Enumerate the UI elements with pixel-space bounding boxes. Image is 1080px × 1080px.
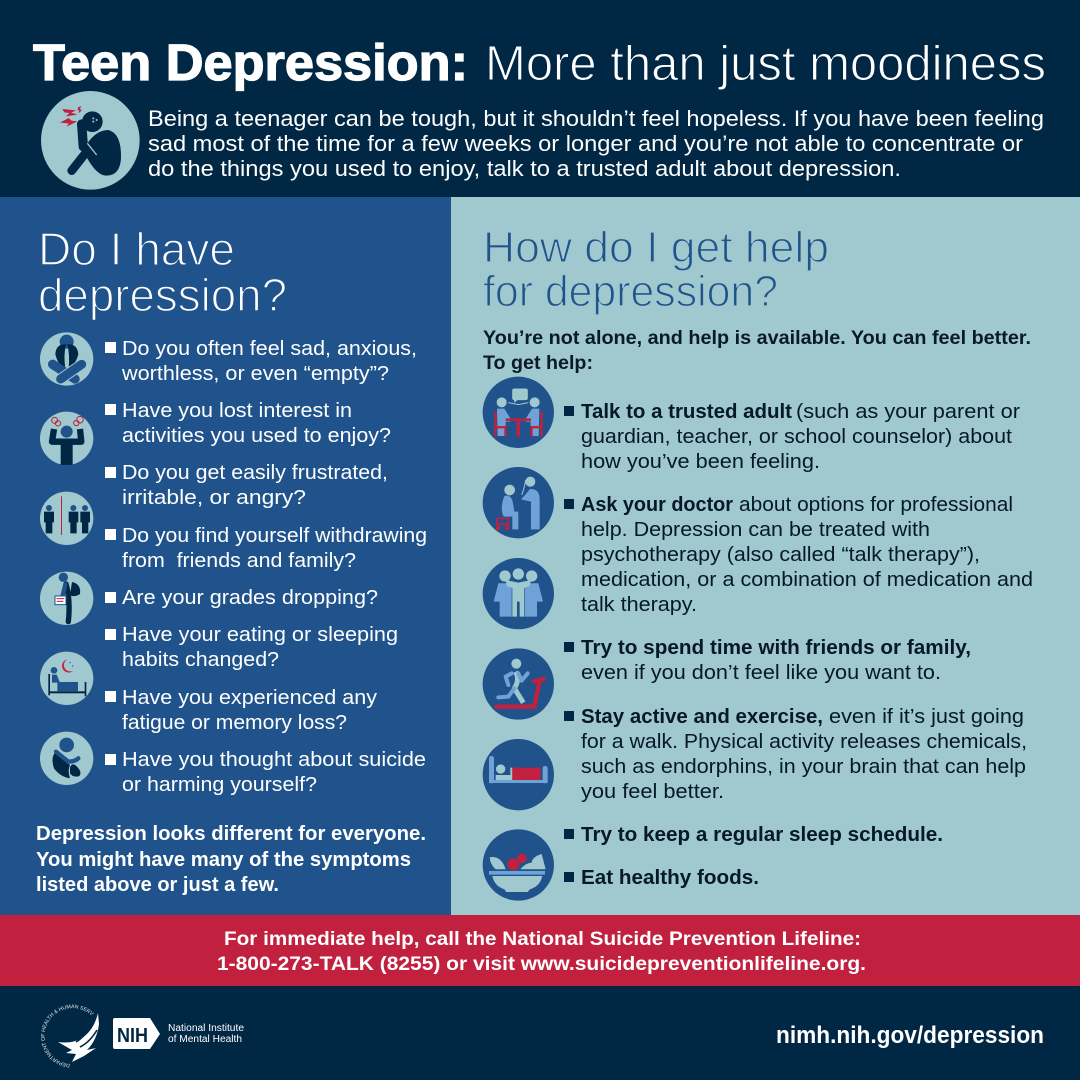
logo: HHS seal [40, 1004, 99, 1068]
heading: How do I get help [483, 223, 829, 316]
help steps list: you feel better. [581, 780, 724, 803]
header band [0, 0, 1080, 197]
icon: treadmill runner [483, 648, 554, 720]
help steps list: Talk to a trusted adult [581, 400, 792, 423]
closing note: Depression looks different for everyone. [36, 822, 426, 845]
icon: angry person [40, 412, 93, 465]
crisis lifeline banner: 1-800-273-TALK (8255) or visit www.suicidepreventionlifeline.org. [217, 953, 866, 975]
help steps list [564, 400, 1033, 889]
icon: student with grades [40, 572, 93, 625]
symptom list: irritable, or angry? [122, 486, 306, 509]
logo: NIH National Institute of Mental Health: NIH [117, 1025, 148, 1047]
intro text: Being a teenager can be tough, but it shouldn’t feel hopeless. If you have been feeling [148, 106, 1044, 131]
symptom list: activities you used to enjoy? [122, 424, 391, 447]
left panel background [0, 197, 451, 915]
logo: NIH National Institute of Mental Health: National Institute [168, 1023, 245, 1034]
help steps list: guardian, teacher, or school counselor) about [581, 425, 1012, 448]
closing note [36, 822, 426, 896]
intro text: do the things you used to enjoy, talk to a trusted adult about depression. [148, 156, 901, 181]
symptom list: Do you find yourself withdrawing [122, 524, 427, 547]
symptom list: fatigue or memory loss? [122, 711, 347, 734]
logo: NIH National Institute of Mental Health: of Mental Health [168, 1034, 242, 1045]
symptom list: or harming yourself? [122, 773, 317, 796]
symptom list: from friends and family? [122, 549, 356, 572]
heading: How do I get help: for depression? [483, 267, 778, 316]
help steps list: Try to spend time with friends or family, [581, 636, 971, 659]
symptom list: Have you thought about suicide [122, 748, 426, 771]
help steps list: even if it’s just going [829, 705, 1024, 728]
icon: teen hunched with head pain [41, 91, 140, 190]
website url: nimh.nih.gov/depression [776, 1022, 1044, 1049]
symptom list: Do you often feel sad, anxious, [122, 337, 417, 360]
crisis lifeline banner: For immediate help, call the National Suicide Prevention Lifeline: [224, 928, 861, 950]
symptom list [105, 337, 427, 796]
heading: Do I have depression: depression? [38, 269, 287, 321]
help steps list: help. Depression can be treated with [581, 518, 930, 541]
icon: person hugging knees [40, 732, 93, 785]
heading: How do I get help: How do I get help [483, 223, 829, 272]
crisis lifeline banner [0, 915, 1080, 986]
help steps list: Stay active and exercise, [581, 705, 823, 728]
help steps list: Eat healthy foods. [581, 866, 759, 889]
footer band [0, 986, 1080, 1080]
help steps list: about options for professional [739, 493, 1013, 516]
icon: talking at table [483, 377, 554, 448]
help steps list: how you’ve been feeling. [581, 450, 820, 473]
right panel background [451, 197, 1080, 915]
icon: friends group [483, 558, 554, 629]
intro: help is available: You’re not alone, and help is available. You can feel better. [483, 327, 1031, 349]
help steps list: for a walk. Physical activity releases chemicals, [581, 730, 1027, 753]
help steps list: medication, or a combination of medication and [581, 568, 1033, 591]
symptom list: worthless, or even “empty”? [121, 362, 389, 385]
intro text: sad most of the time for a few weeks or longer and you’re not able to concentrate or [148, 131, 1024, 156]
intro: help is available: To get help: [483, 352, 593, 374]
help steps list: even if you don’t feel like you want to. [581, 661, 941, 684]
logo: HHS seal: DEPARTMENT OF HEALTH & HUMAN SERVICES, USA [40, 1004, 94, 1068]
icon: sad person cross-legged [40, 332, 93, 386]
symptom list: Have your eating or sleeping [122, 623, 398, 646]
symptom list: Do you get easily frustrated, [122, 461, 388, 484]
title: Teen Depression: [33, 34, 468, 91]
heading: Do I have depression [38, 223, 287, 321]
title [33, 34, 1046, 91]
icon: person apart from others [40, 492, 93, 545]
panel: do I have depression [36, 223, 427, 896]
help steps list: Ask your doctor [581, 493, 733, 516]
help steps list: Try to keep a regular sleep schedule. [581, 823, 943, 846]
closing note: listed above or just a few. [36, 873, 279, 896]
title: More than just moodiness [485, 37, 1046, 91]
closing note: You might have many of the symptoms [36, 848, 411, 871]
intro: help is available [483, 327, 1031, 374]
help steps list: (such as your parent or [796, 400, 1020, 423]
heading: Do I have depression: Do I have [38, 223, 235, 275]
help steps list: talk therapy. [581, 593, 697, 616]
intro text [148, 106, 1044, 181]
symptom list: Are your grades dropping? [122, 586, 378, 609]
help steps list: such as endorphins, in your brain that can help [581, 755, 1026, 778]
logo: NIH National Institute of Mental Health [113, 1018, 245, 1049]
icon: bed [483, 739, 554, 810]
help steps list: psychotherapy (also called “talk therapy”), [581, 543, 980, 566]
icon: bowl of healthy food [483, 829, 554, 901]
icon: doctor with patient [483, 467, 554, 538]
symptom list: habits changed? [122, 648, 279, 671]
symptom list: Have you lost interest in [122, 399, 352, 422]
icon: person awake in bed [40, 652, 93, 705]
panel: how do I get help [483, 223, 1033, 901]
symptom list: Have you experienced any [122, 686, 378, 709]
